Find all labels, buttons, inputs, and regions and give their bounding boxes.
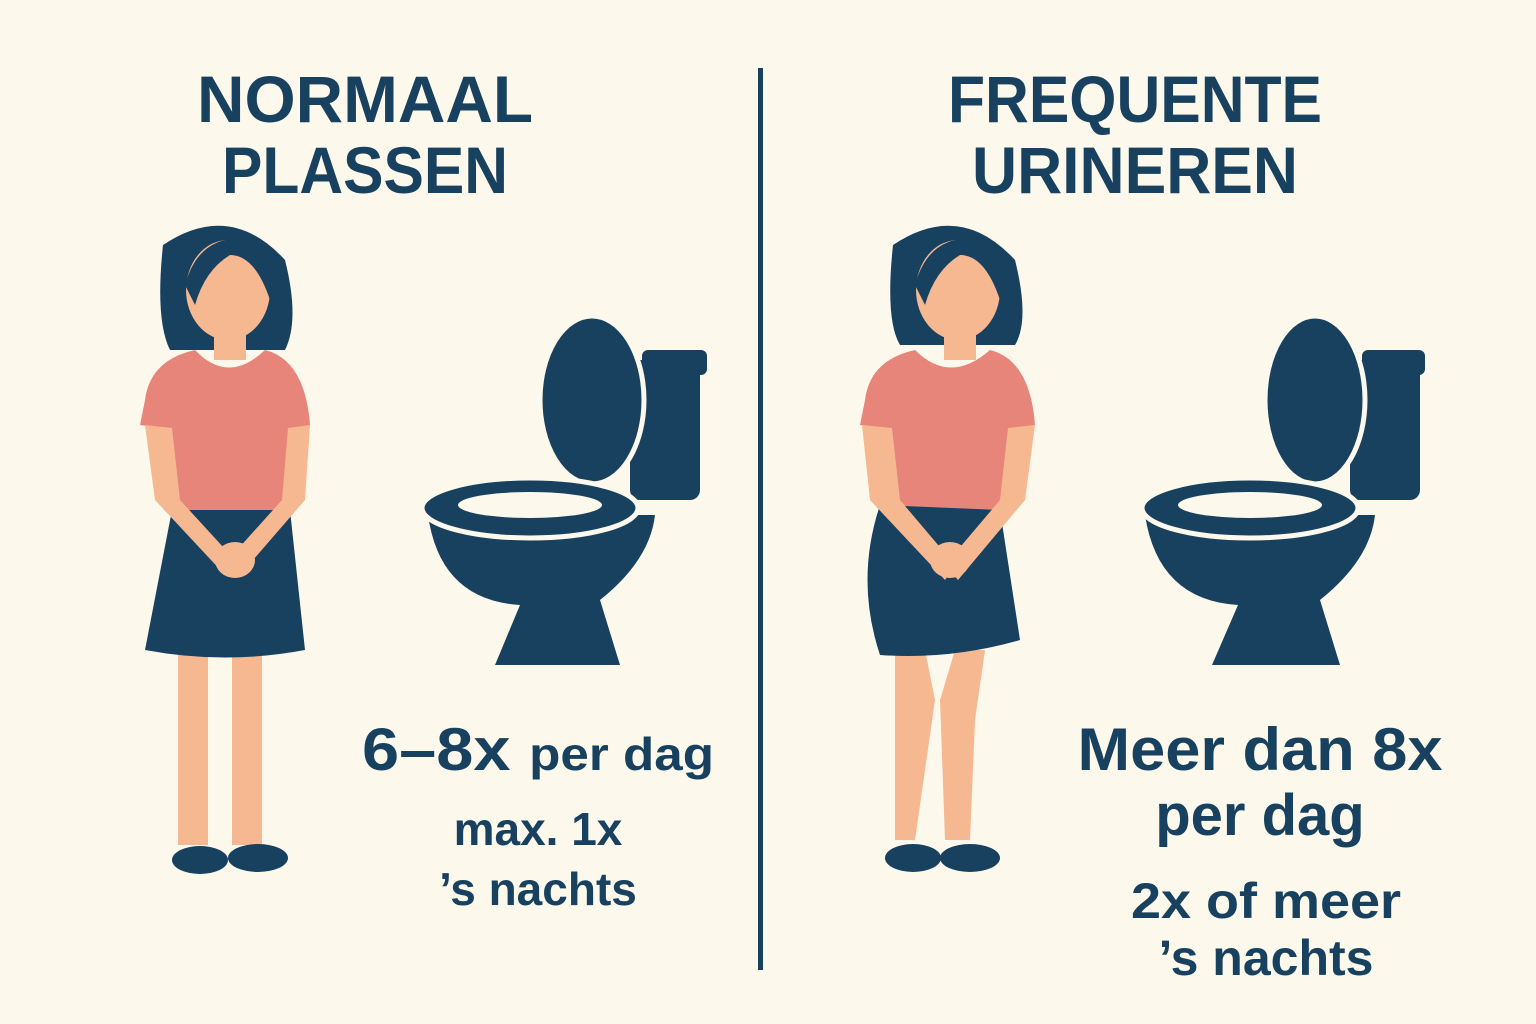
- text: normaal frequency: 6–8x per dag: [362, 716, 714, 783]
- icon: woman right: [860, 226, 1035, 872]
- text: frequent frequency: 2x of meer: [1131, 873, 1401, 929]
- divider: [758, 68, 763, 970]
- icon: toilet left: [422, 316, 707, 665]
- title: frequente urineren: FREQUENTE: [948, 62, 1322, 136]
- text: normaal frequency: max. 1x: [454, 803, 623, 855]
- text: frequent frequency: ’s nachts: [1159, 930, 1373, 986]
- text: frequent frequency: [1078, 716, 1442, 986]
- text: normaal frequency: ’s nachts: [439, 863, 637, 915]
- icon: toilet right: [1142, 316, 1425, 665]
- icon: woman left: [140, 226, 310, 874]
- title: frequente urineren: URINEREN: [972, 133, 1298, 207]
- text: normaal frequency: [362, 716, 714, 915]
- title: normaal plassen: NORMAAL: [197, 62, 533, 136]
- text: frequent frequency: per dag: [1155, 783, 1365, 848]
- text: frequent frequency: Meer dan 8x: [1078, 716, 1442, 783]
- title: normaal plassen: [197, 62, 533, 207]
- title: normaal plassen: PLASSEN: [222, 133, 508, 207]
- title: frequente urineren: [948, 62, 1322, 207]
